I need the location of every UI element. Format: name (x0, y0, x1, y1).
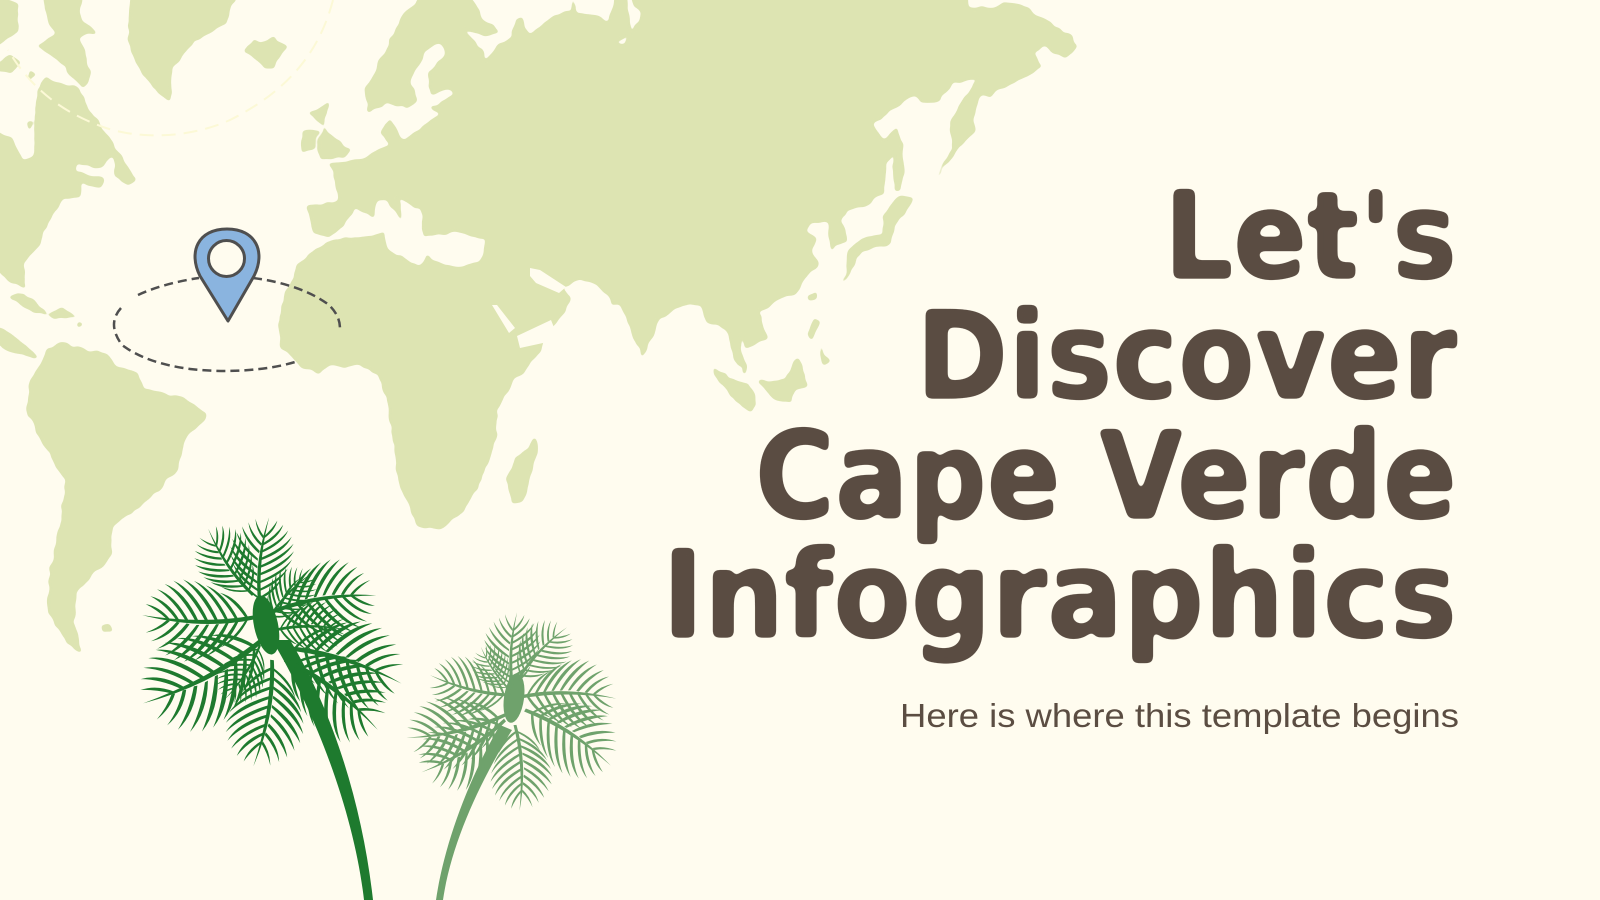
title: Discover (916, 286, 1457, 427)
icon: location pin (195, 229, 259, 321)
map: inland seas (492, 268, 566, 348)
map: South America (28, 343, 205, 653)
title: Cape Verde (755, 406, 1457, 547)
map: Caribbean islands (10, 293, 83, 328)
palm tree: light green (398, 608, 632, 900)
map: Canadian Arctic islands (0, 0, 96, 130)
world map (0, 0, 1078, 653)
map: Britain and Ireland (302, 102, 350, 160)
map: Greenland (128, 0, 241, 100)
dashed orbit around pin (114, 278, 340, 371)
map: North America (0, 77, 136, 287)
faint dashed route (8, 0, 333, 135)
map: Iceland (245, 37, 287, 68)
title (662, 166, 1457, 666)
map: Eurasia and Africa (279, 0, 1078, 529)
map: Japan (843, 197, 913, 283)
map: small island (101, 624, 113, 633)
palm tree: dark green (122, 514, 414, 900)
subtitle: Here is where this template begins (900, 697, 1459, 734)
title: Let's (1164, 166, 1457, 307)
map: Central America (0, 322, 38, 358)
title: Infographics (662, 525, 1457, 666)
map: Madagascar (507, 439, 538, 503)
map: Southeast Asian islands (712, 292, 829, 412)
